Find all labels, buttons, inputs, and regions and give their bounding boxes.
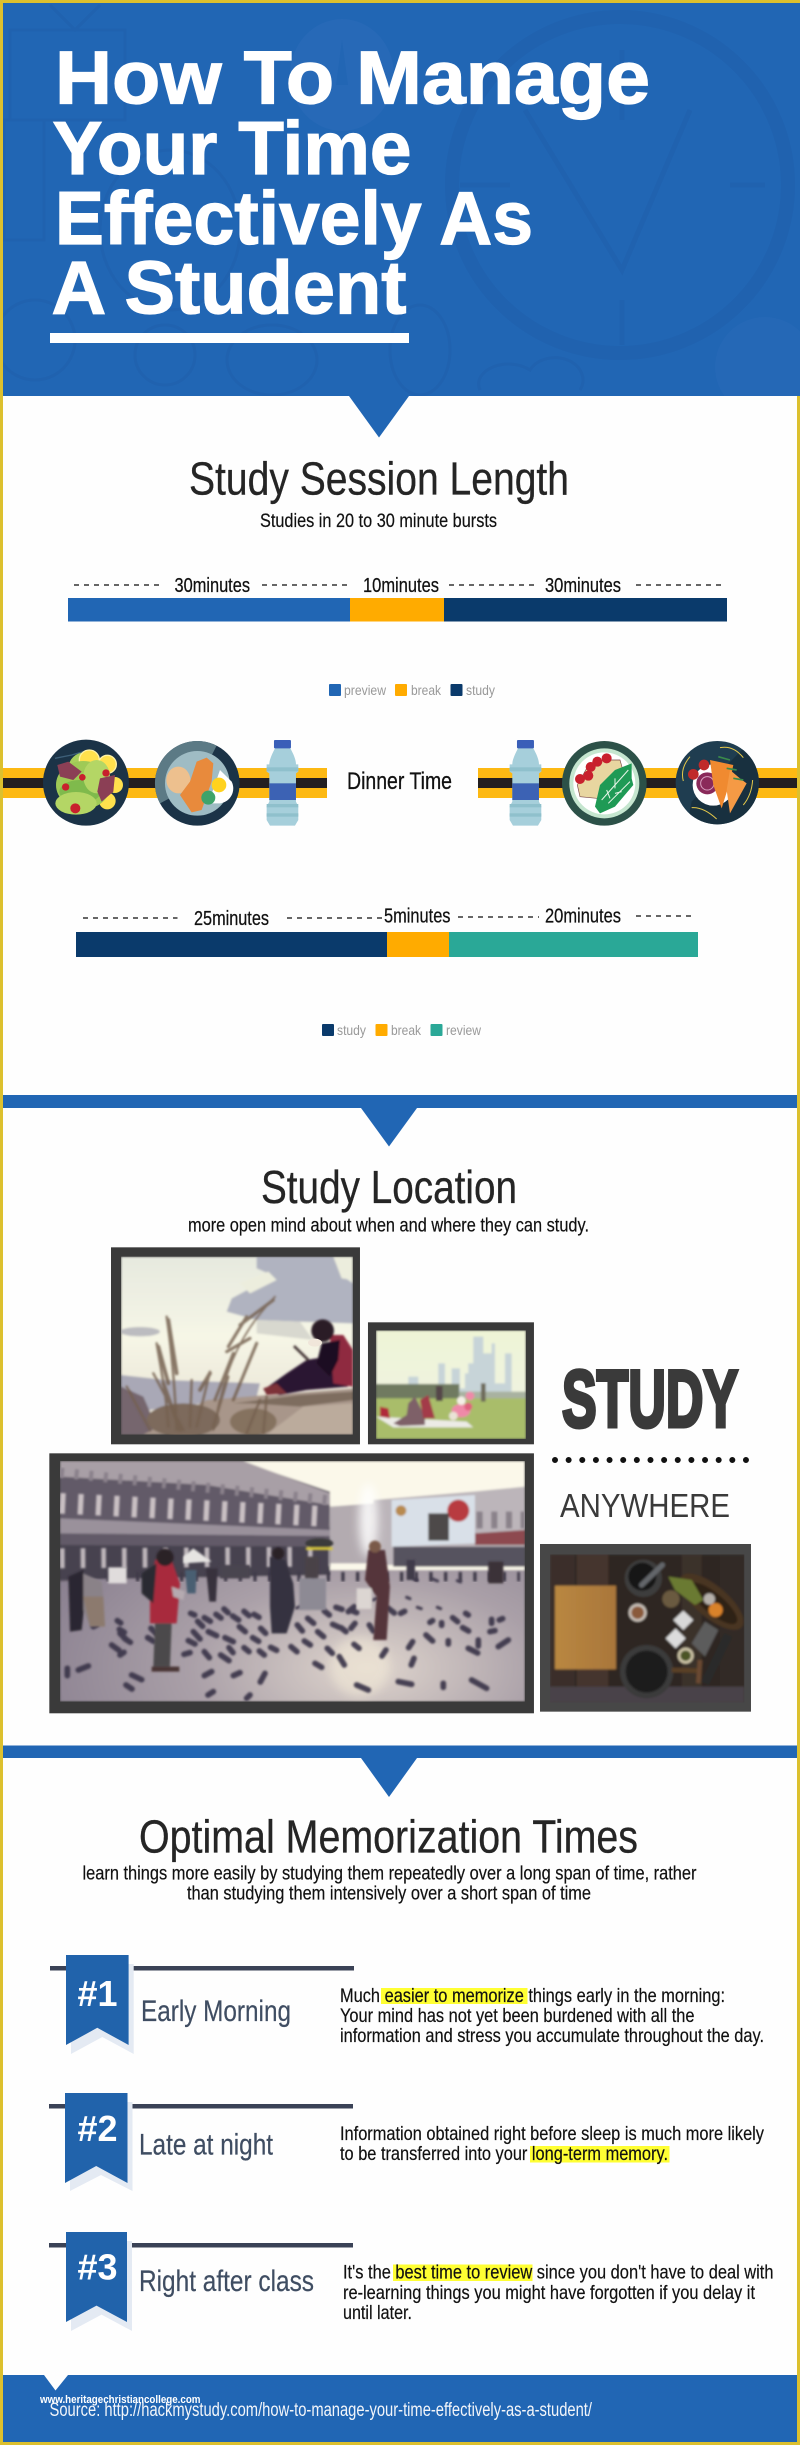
stacked bar: preview, break, study: [68, 598, 727, 622]
row description: [343, 2262, 774, 2324]
duration labels: second schedule: 20minutes: [545, 906, 621, 928]
photo: pigeons in a city square: [49, 1453, 534, 1713]
duration labels: second schedule: 25minutes: [194, 908, 269, 930]
subheading: than studying them intensively over a short span of time: [187, 1884, 591, 1904]
legend: study, break, review: review: [446, 1022, 482, 1038]
text: anywhere: ANYWHERE: [560, 1487, 730, 1524]
duration labels: first schedule: 30minutes: [545, 575, 621, 597]
panel: study session length: [68, 452, 727, 698]
title: A Student: [52, 246, 407, 330]
legend: study, break, review: break: [391, 1022, 422, 1038]
icon: water bottle left: [267, 740, 298, 826]
panel: dinner time strip: [3, 740, 797, 828]
row description: until later.: [343, 2302, 412, 2324]
icon: fish and egg plate: [155, 741, 240, 826]
heading: study session length: Study Session Length: [189, 452, 569, 504]
building columns: [60, 1473, 525, 1577]
legend: preview, break, study: preview: [344, 682, 387, 698]
icon: water bottle right: [510, 740, 541, 826]
legend: preview, break, study: study: [466, 682, 495, 698]
subheading: learn things more easily by studying them repeatedly over a long span of time, rather: [82, 1864, 697, 1884]
panel: optimal memorization times: [49, 1810, 774, 2331]
legend: preview, break, study: break: [411, 682, 442, 698]
legend: study, break, review: study: [337, 1022, 366, 1038]
title: Your Time: [52, 106, 412, 190]
heading: study location: Study Location: [261, 1161, 517, 1213]
photo: picnic on a lawn with city skyline: [368, 1322, 534, 1444]
pigeons flock: [67, 1579, 508, 1698]
row description: [340, 1985, 764, 2047]
dinner time label: Dinner Time: [347, 768, 452, 795]
people in the square: [68, 1538, 503, 1672]
striped band: [3, 768, 797, 798]
header banner: [0, 3, 800, 438]
dotted divider: [555, 1457, 746, 1463]
title: Effectively As: [55, 176, 533, 260]
title underline: [50, 333, 409, 343]
row 3: right after class: [49, 2232, 774, 2331]
row 1: early morning: [50, 1955, 764, 2054]
subheading: more open mind about when and where they can study.: [188, 1216, 589, 1236]
duration labels: second schedule: 5minutes: [384, 906, 450, 928]
ribbon badge #2: [65, 2093, 132, 2191]
icon: salad plate: [43, 740, 129, 826]
duration labels: first schedule: 10minutes: [363, 575, 439, 597]
row description: Much easier to memorize things early in the morning:: [340, 1985, 725, 2007]
ribbon badge #1: #1: [78, 1973, 118, 2014]
photo: person reading on a rock: [111, 1247, 360, 1444]
watermark url: www.heritagechristiancollege.com: [39, 2394, 201, 2406]
row 2: late at night: [49, 2093, 764, 2191]
ribbon badge #3: #3: [78, 2246, 118, 2288]
row title: Late at night: [139, 2128, 274, 2162]
row title: Early Morning: [141, 1995, 291, 2028]
ribbon badge #1: [66, 1955, 134, 2054]
duration labels: second schedule: [83, 906, 691, 930]
decorative clock icons in header background: [0, 5, 800, 417]
section divider with pointer: location: [3, 1095, 797, 1146]
duration labels: first schedule: [74, 575, 722, 597]
ribbon badge #2: #2: [78, 2108, 118, 2149]
subheading: Studies in 20 to 30 minute bursts: [260, 511, 497, 532]
panel: study location: [49, 1161, 752, 1713]
footer: [3, 2375, 797, 2442]
source line: Source: http://hackmystudy.com/how-to-manage-your-time-effectively-as-a-student/: [50, 2400, 593, 2421]
row description: [340, 2123, 764, 2165]
legend: study, break, review: [322, 1022, 482, 1038]
section divider with pointer: memorization: [3, 1746, 797, 1797]
row description: Your mind has not yet been burdened with all the: [340, 2005, 694, 2027]
banner pointer: [349, 396, 409, 438]
duration labels: first schedule: 30minutes: [174, 575, 250, 597]
title: [52, 36, 650, 330]
ribbon badge #3: [66, 2232, 132, 2331]
icon: carrot and beet plate: [676, 741, 763, 828]
footer notch: [44, 2375, 68, 2390]
heading: optimal memorization times: Optimal Memorization Times: [139, 1810, 638, 1862]
row description: to be transferred into your long-term memory.: [340, 2143, 668, 2165]
title: How To Manage: [55, 36, 650, 120]
subheading: [82, 1864, 697, 1904]
row title: Right after class: [139, 2265, 314, 2298]
panel: second study schedule: [76, 906, 698, 1038]
photo: kitchen table with utensils: [540, 1544, 752, 1712]
legend: preview, break, study: [329, 682, 495, 698]
icon: potato and greens plate: [562, 741, 647, 826]
stacked bar: study, break, review: [76, 932, 698, 957]
